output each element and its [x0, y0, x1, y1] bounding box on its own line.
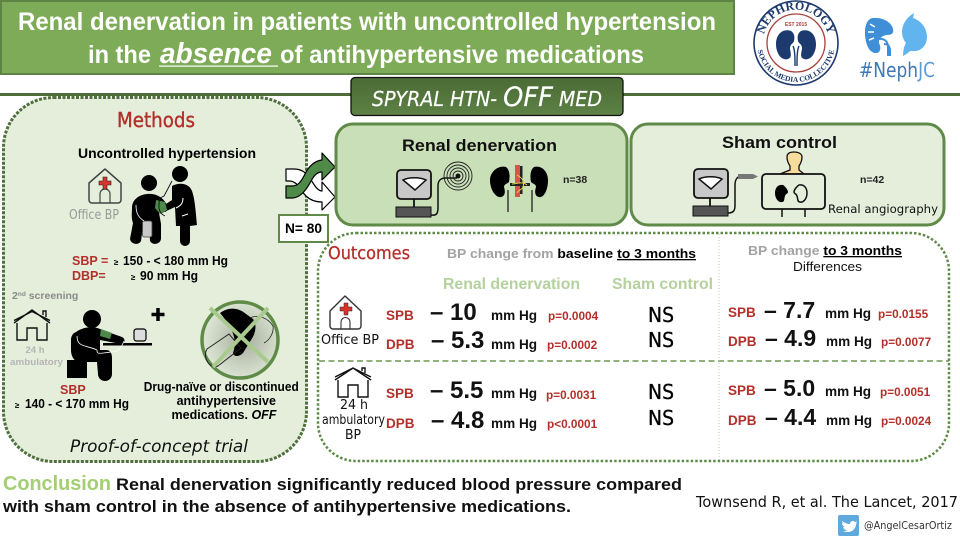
- label: office BP: Office BP: [69, 208, 119, 223]
- study name badge: SPYRAL HTN- OFF MED: [372, 82, 602, 113]
- row: ambulatory DBP: p<0.0001: [547, 417, 598, 431]
- label: 24 h ambulatory: 24 h: [25, 345, 45, 356]
- column header: differences: Differences: [793, 259, 863, 274]
- row: office SBP: SPB: [386, 308, 414, 323]
- row: ambulatory SBP: p=0.0031: [546, 388, 597, 402]
- row: office SBP: p=0.0004: [548, 309, 599, 323]
- row: office DBP: mm Hg: [491, 337, 537, 352]
- title banner: [1, 1, 734, 74]
- panel: methods: [4, 98, 306, 462]
- label: 24 h ambulatory BP: ambulatory: [322, 413, 385, 428]
- conclusion: Conclusion: [3, 473, 111, 495]
- row: office DBP: DPB: [386, 337, 415, 352]
- row: ambulatory SBP: p=0.0051: [880, 385, 931, 399]
- criteria: office SBP and DBP: 150 - < 180 mm Hg: [123, 254, 228, 268]
- row: ambulatory DBP: NS: [648, 406, 674, 430]
- row: ambulatory SBP: mm Hg: [491, 386, 537, 401]
- column header: differences: BP change to 3 months: [748, 243, 902, 258]
- logo: Nephrology Social Media Collective: [753, 0, 839, 86]
- row: ambulatory SBP: – 5.5: [430, 377, 483, 404]
- conclusion: [2, 473, 682, 516]
- row: ambulatory DBP: – 4.8: [431, 407, 484, 434]
- row: office DBP: NS: [648, 328, 674, 352]
- arrows: randomisation: [286, 153, 335, 210]
- row: office SBP: mm Hg: [825, 306, 871, 321]
- title banner: Renal denervation in patients with uncontrolled hypertension: [18, 8, 716, 36]
- heading: outcomes: Outcomes: [328, 243, 410, 264]
- label: renal angiography: Renal angiography: [828, 202, 938, 216]
- row: office DBP: – 5.3: [431, 327, 484, 354]
- label: ambulatory: ambulatory: [10, 357, 64, 368]
- column header: renal denervation: Renal denervation: [443, 276, 580, 293]
- row: ambulatory DBP: DPB: [386, 416, 415, 431]
- heading: methods: Methods: [117, 108, 195, 132]
- logo: NephJC: [859, 13, 935, 82]
- text: drug-naive criterion: antihypertensive: [177, 394, 276, 408]
- icon: home: [335, 368, 371, 397]
- label: n=42: n=42: [860, 174, 884, 186]
- row: ambulatory SBP: SPB: [728, 383, 756, 398]
- column header: sham control: Sham control: [612, 276, 713, 293]
- twitter handle: @AngelCesarOrtiz: [864, 520, 952, 532]
- row: office SBP: – 7.7: [764, 297, 815, 323]
- row: ambulatory SBP: mm Hg: [825, 384, 871, 399]
- criteria: office SBP and DBP: ≥: [131, 273, 136, 282]
- icon: crossed-out pills: [202, 302, 278, 378]
- row: office SBP: – 10: [430, 299, 477, 326]
- icon: clinic: [89, 169, 121, 203]
- study name badge: [351, 78, 623, 116]
- heading: renal denervation: Renal denervation: [402, 136, 557, 155]
- criteria: office SBP and DBP: ≥: [114, 258, 119, 267]
- logo: Nephrology Social Media Collective: SOCIAL MEDIA COLLECTIVE: [758, 50, 834, 82]
- text: drug-naive criterion: Drug-naïve or discontinued: [144, 380, 299, 394]
- column header: change from baseline: BP change from baseline to 3 months: [447, 246, 696, 261]
- icon: plus: [152, 308, 164, 321]
- label: 2nd screening: nd: [18, 291, 26, 298]
- conclusion: with sham control in the absence of antihypertensive medications.: [2, 497, 571, 516]
- criteria: ambulatory SBP: ≥: [15, 401, 20, 410]
- row: office DBP: DPB: [728, 334, 757, 349]
- logo: Nephrology Social Media Collective: EST 2015: [785, 22, 807, 28]
- label: office BP: Office BP: [321, 333, 379, 348]
- panel: sham control: [631, 124, 944, 225]
- criteria: office SBP and DBP: DBP=: [72, 269, 106, 283]
- label: 2nd screening: screening: [26, 290, 78, 302]
- row: office SBP: NS: [648, 303, 674, 327]
- row: ambulatory SBP: – 5.0: [764, 375, 815, 401]
- label: 2nd screening: 2: [12, 290, 18, 302]
- row: ambulatory DBP: mm Hg: [826, 413, 872, 428]
- label: N= 80: [279, 215, 328, 242]
- criteria: ambulatory SBP: 140 - < 170 mm Hg: [25, 397, 129, 411]
- criteria: office SBP and DBP: 90 mm Hg: [140, 269, 198, 283]
- label: 24 h ambulatory BP: BP: [345, 428, 361, 443]
- row: office DBP: – 4.9: [765, 325, 816, 351]
- subheading: uncontrolled hypertension: Uncontrolled hypertension: [78, 146, 256, 161]
- logo: NephJC: #NephJC: [859, 58, 935, 82]
- icon: console: [693, 169, 758, 216]
- row: office DBP: mm Hg: [826, 334, 872, 349]
- row: office DBP: [386, 325, 932, 354]
- label: proof-of-concept trial: Proof-of-concept trial: [70, 437, 248, 457]
- icon: renal angiography monitor: [762, 152, 825, 217]
- row: office SBP: mm Hg: [491, 308, 537, 323]
- row: ambulatory SBP: SPB: [386, 386, 414, 401]
- panel: outcomes: [318, 233, 949, 461]
- row: office SBP: SPB: [728, 305, 756, 320]
- label: N= 80: N= 80: [285, 221, 322, 236]
- row: ambulatory DBP: DPB: [728, 413, 757, 428]
- heading: sham control: Sham control: [722, 133, 837, 152]
- row: ambulatory SBP: [386, 375, 931, 404]
- criteria: office SBP and DBP: [72, 254, 228, 283]
- icon: patient measuring blood pressure: [67, 310, 152, 381]
- text: drug-naive criterion: medications. OFF: [172, 408, 276, 422]
- row: ambulatory DBP: [386, 404, 932, 434]
- twitter handle: [838, 515, 952, 536]
- icon: kidneys with renal nerves: [490, 165, 548, 212]
- row: ambulatory DBP: p=0.0024: [881, 414, 932, 428]
- title banner: in the: [88, 41, 151, 69]
- conclusion: Renal denervation significantly reduced blood pressure compared: [116, 475, 682, 494]
- row: office SBP: p=0.0155: [878, 307, 929, 321]
- icon: denervation generator: [396, 162, 472, 217]
- label: n=38: n=38: [563, 174, 587, 186]
- title banner: of antihypertensive medications: [280, 41, 644, 69]
- row: office DBP: p=0.0002: [547, 338, 598, 352]
- icon: doctor measuring blood pressure: [130, 166, 197, 246]
- icon: clinic: [330, 296, 361, 329]
- criteria: office SBP and DBP: SBP =: [72, 254, 108, 268]
- row: ambulatory DBP: mm Hg: [491, 416, 537, 431]
- icon: home: [14, 310, 50, 340]
- label: 24 h ambulatory BP: 24 h: [340, 398, 368, 413]
- criteria: ambulatory SBP: SBP: [60, 383, 86, 397]
- row: office SBP: [386, 297, 929, 327]
- row: ambulatory DBP: – 4.4: [765, 404, 816, 430]
- title banner: absence: [160, 38, 272, 70]
- divider line: [0, 93, 960, 96]
- column header: differences: [748, 243, 902, 274]
- row: office DBP: p=0.0077: [881, 335, 932, 349]
- panel: renal denervation: [336, 124, 627, 225]
- criteria: ambulatory SBP: [15, 383, 129, 411]
- row: ambulatory SBP: NS: [648, 380, 674, 404]
